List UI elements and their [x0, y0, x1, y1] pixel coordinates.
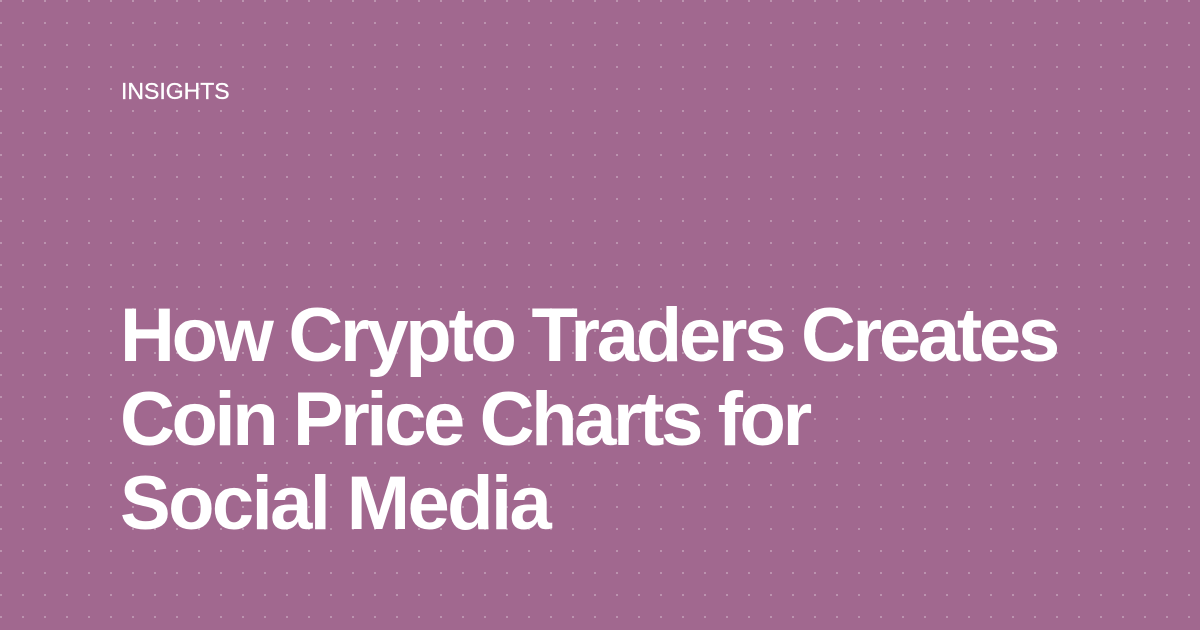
category label: INSIGHTS: [121, 78, 230, 104]
title: How Crypto Traders Creates: [120, 293, 1057, 378]
title: Coin Price Charts for: [120, 377, 809, 462]
title: [120, 293, 1057, 546]
title: Social Media: [120, 461, 549, 546]
